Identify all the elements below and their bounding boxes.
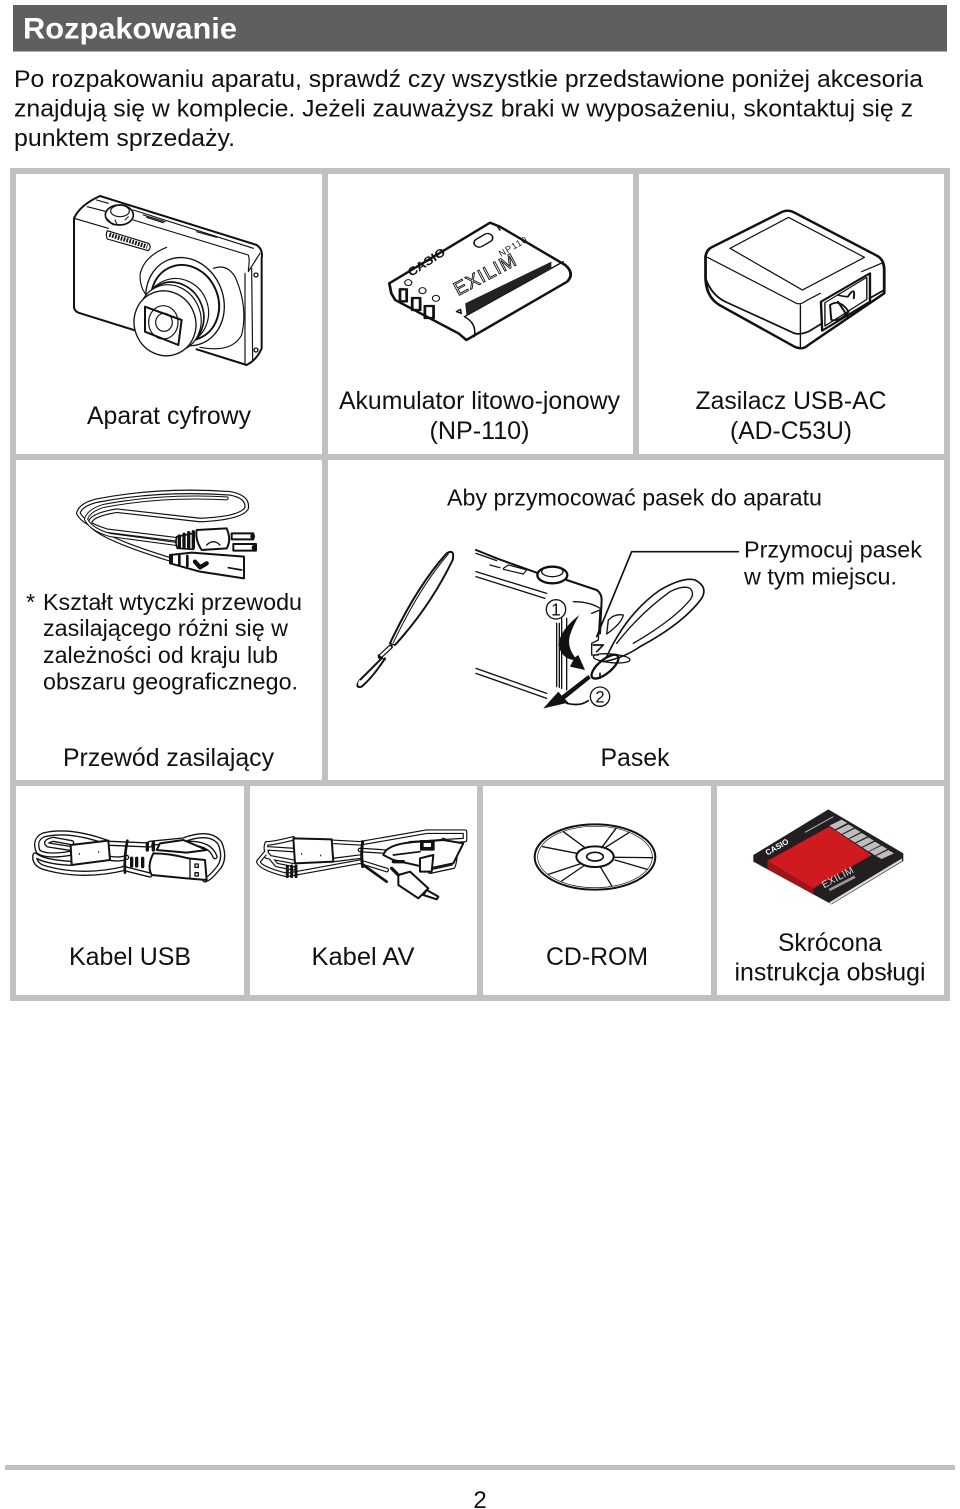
intro text: znajdują się w komplecie. Jeżeli zauważysz braki w wyposażeniu, skontaktuj się z [14,96,913,122]
label: Przewód zasilający [63,744,274,772]
label: CD-ROM [546,943,648,971]
panel: quick start manual [734,809,926,986]
note: obszaru geograficznego. [43,668,298,694]
callout text [743,536,922,590]
panel: strap [357,484,922,772]
label: Zasilacz USB-AC [696,387,886,415]
intro text: Po rozpakowaniu aparatu, sprawdź czy wszystkie przedstawione poniżej akcesoria [14,66,923,93]
panel: power cord [26,492,302,772]
icon: CD disc [535,824,655,890]
label: instrukcja obsługi [734,958,926,986]
callout line [597,552,738,637]
note: * [26,589,35,615]
icon: AV cable [258,832,465,899]
heading: Aby przymocować pasek do aparatu [447,484,822,510]
note: zależności od kraju lub [43,642,278,668]
panel: USB-AC adapter [696,211,886,445]
footer rule [5,1465,955,1470]
panel: USB-AC adapter: (AD-C53U) [730,417,852,445]
panel: AV cable [258,832,465,971]
label: Aparat cyfrowy [87,402,251,430]
label [734,929,926,986]
icon: manual: EXILIM [820,865,856,891]
icon: battery [389,223,571,340]
note [26,589,302,694]
accessory grid frame [10,168,950,1001]
label: Kabel AV [312,943,415,971]
icon: camera side with strap: 2 [595,688,605,707]
strap and camera illustration [357,550,738,708]
header bar: Rozpakowanie [23,12,237,45]
icon: adapter [706,211,884,348]
icon: power cord [78,492,256,578]
label: Kabel USB [69,943,191,971]
panel: CD-ROM [535,824,655,971]
callout text: Przymocuj pasek [744,536,922,562]
label: Akumulator litowo-jonowy [339,387,620,415]
label: Skrócona [778,929,882,957]
header bar [13,5,947,52]
icon: camera side with strap [476,550,704,708]
note: zasilającego różni się w [43,615,289,641]
icon: manual: CASIO [764,837,790,857]
icon: battery: EXILIM [450,250,521,300]
icon: battery: NP110 [497,234,530,259]
intro text [14,66,923,152]
panel: battery [339,223,620,445]
icon: camera side with strap: 1 [551,599,561,619]
icon: battery: CASIO [405,245,448,280]
icon: strap [357,552,453,687]
panel: USB cable [35,833,223,971]
panel: digital camera [74,196,262,430]
note: Kształt wtyczki przewodu [43,589,302,615]
callout text: w tym miejscu. [743,564,897,590]
label: Pasek [600,744,670,772]
icon: camera [74,196,262,365]
panel: battery: (NP-110) [430,417,530,445]
intro text: punktem sprzedaży. [14,125,235,152]
icon: USB cable [35,833,223,880]
icon: manual [753,809,903,904]
